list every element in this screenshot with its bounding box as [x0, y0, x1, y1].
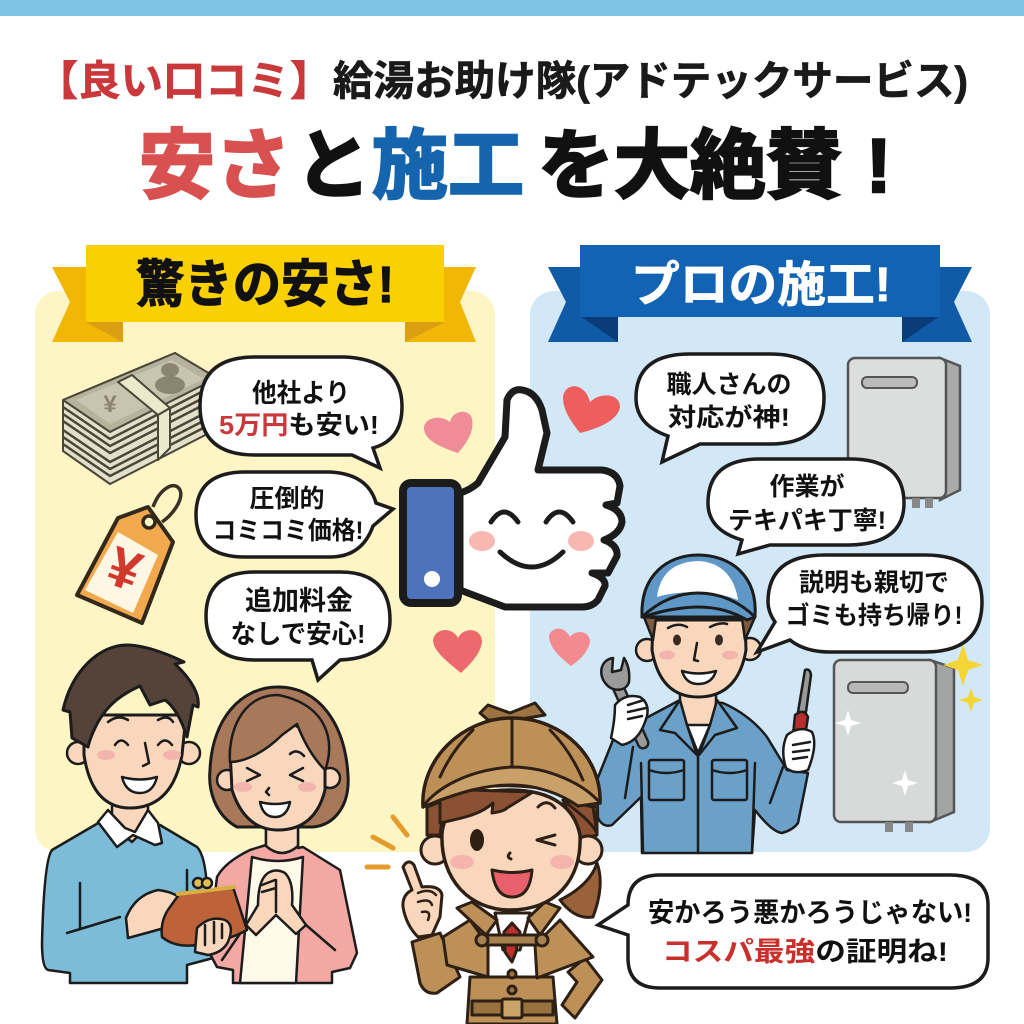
callout: careful work: 作業が [769, 472, 845, 501]
title: 施工 [372, 124, 524, 209]
callout: all inclusive: 圧倒的 [249, 485, 325, 513]
callout: no additional fees: 追加料金 [245, 586, 353, 616]
icon: smiling thumbs-up [403, 390, 622, 607]
callout: all inclusive: コミコミ価格! [212, 517, 364, 545]
title: 【良い口コミ】 [36, 58, 332, 104]
icon: price tag [77, 486, 181, 623]
callout: craftsman response: 対応が神! [668, 403, 790, 432]
callout: detective speech: コスパ最強 の証明ね! [662, 937, 948, 967]
callout: no additional fees [206, 572, 390, 680]
figure: man with wallet [42, 645, 217, 983]
ribbon: pro heading: プロの施工! [631, 259, 891, 312]
callout: all inclusive [196, 472, 393, 557]
ribbon: cheap heading: 驚きの安さ! [136, 256, 394, 313]
callout: no additional fees: なしで安心! [230, 619, 366, 649]
title: 安さ [139, 124, 291, 209]
ribbon: cheap heading [52, 245, 476, 342]
callout: kind explanation [757, 555, 982, 652]
title: 大絶賛 [614, 124, 842, 209]
figure: woman [208, 687, 357, 983]
callout: 5万円 cheaper [200, 357, 402, 468]
icon: hearts [424, 386, 620, 673]
callout: kind explanation: 説明も親切で [799, 569, 949, 597]
panel: pro work [530, 291, 990, 852]
callout: craftsman response [636, 354, 824, 462]
callout: careful work [708, 459, 904, 554]
callout: detective speech [598, 875, 988, 988]
callout: kind explanation: ゴミも持ち帰り! [786, 601, 962, 630]
ribbon: pro heading [548, 245, 972, 342]
icon: banknote stacks: ¥ [103, 391, 117, 418]
icon: coin purse with hands [126, 878, 247, 955]
figure: worker [597, 555, 814, 853]
icon: water heater bottom [834, 660, 954, 832]
callout: detective speech: 安かろう悪かろうじゃない! [648, 898, 972, 928]
panel: cheap [35, 291, 495, 852]
callout: 5万円 cheaper: 5万円も安い! [219, 410, 379, 440]
callout: 5万円 cheaper: 他社より [252, 378, 350, 408]
icon: sparkles [943, 644, 983, 712]
icon: price tag: ¥ [99, 534, 150, 604]
callout: craftsman response: 職人さんの [666, 371, 792, 399]
title [36, 58, 968, 209]
title: と [295, 124, 371, 209]
title: ! [866, 124, 891, 209]
icon: banknote stacks [63, 353, 217, 484]
title: 給湯お助け隊(アドテックサービス) [333, 58, 968, 104]
icon: water heater top [848, 358, 960, 508]
title: を [538, 124, 614, 209]
callout: careful work: テキパキ丁寧! [728, 507, 886, 535]
figure: detective [367, 703, 602, 1024]
